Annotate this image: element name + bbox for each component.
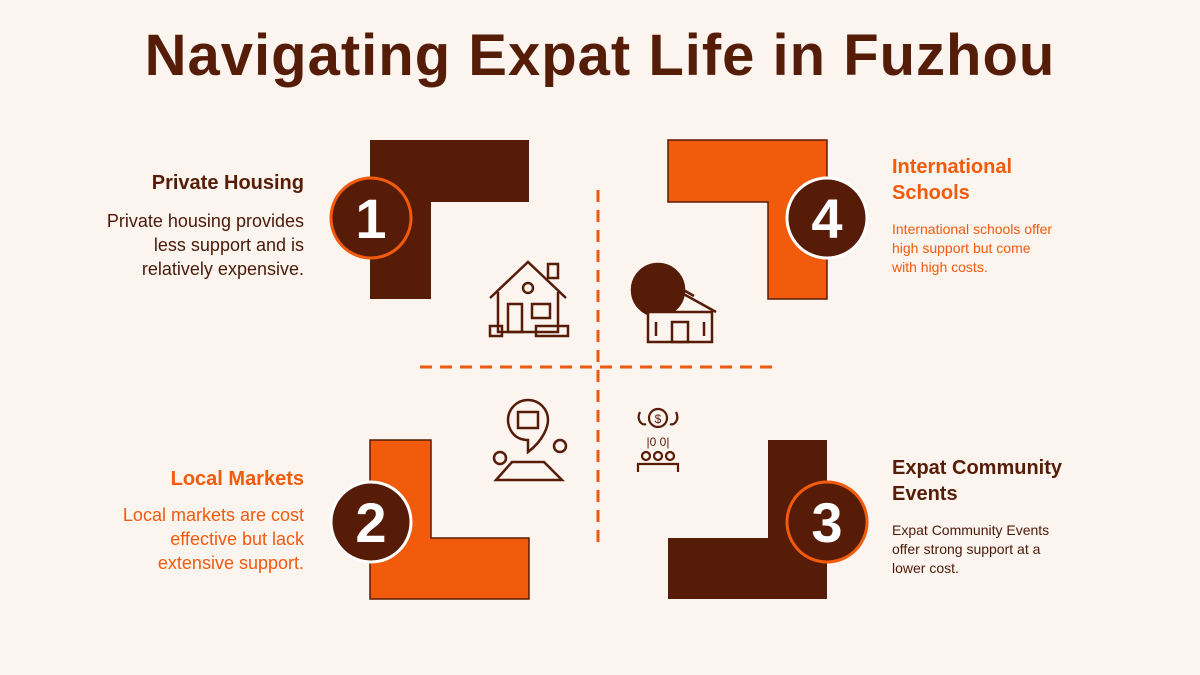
text: Private Housing: relatively expensive. <box>142 259 304 279</box>
text: International Schools: International schools offer <box>892 221 1052 237</box>
L-shape 3 <box>668 440 827 599</box>
circle 1 <box>331 178 411 258</box>
icon: community money: |0 0| <box>647 435 669 449</box>
text: Private Housing: less support and is <box>154 235 304 255</box>
icon: market location <box>494 400 566 480</box>
text: International Schools: high support but come <box>892 240 1031 256</box>
icon: house <box>490 262 568 336</box>
text: International Schools <box>892 156 1052 275</box>
text: Private Housing: Private Housing <box>152 172 304 194</box>
circle 2: 2 <box>355 491 387 554</box>
icon: community money <box>638 409 678 472</box>
text: Local Markets: effective but lack <box>170 529 304 549</box>
text: Expat Community Events: Events <box>892 483 958 505</box>
icon: community money: $ <box>655 412 662 426</box>
text: Private Housing: Private housing provides <box>107 211 304 231</box>
circle 3: 3 <box>811 491 843 554</box>
title: Navigating Expat Life in Fuzhou <box>145 23 1055 88</box>
text: International Schools: Schools <box>892 182 970 204</box>
text: Local Markets <box>123 468 304 573</box>
circle 4 <box>787 178 867 258</box>
circle 4: 4 <box>811 187 843 250</box>
circle 2 <box>331 482 411 562</box>
text: Expat Community Events: Expat Community <box>892 457 1062 479</box>
text: Expat Community Events: offer strong support at a <box>892 541 1040 557</box>
L-shape 1 <box>370 140 529 299</box>
text: Expat Community Events <box>892 457 1062 576</box>
text: Expat Community Events: lower cost. <box>892 560 959 576</box>
icon: school globe <box>632 264 716 342</box>
text: Local Markets: extensive support. <box>158 553 304 573</box>
text: Local Markets: Local markets are cost <box>123 505 304 525</box>
text: Private Housing <box>107 172 304 279</box>
L-shape 4 <box>668 140 827 299</box>
text: Expat Community Events: Expat Community Events <box>892 522 1049 538</box>
text: Local Markets: Local Markets <box>171 468 304 490</box>
circle 1: 1 <box>355 187 387 250</box>
text: International Schools: with high costs. <box>892 259 988 275</box>
dashed dividers <box>420 190 776 545</box>
text: International Schools: International <box>892 156 1012 178</box>
L-shape 2 <box>370 440 529 599</box>
circle 3 <box>787 482 867 562</box>
